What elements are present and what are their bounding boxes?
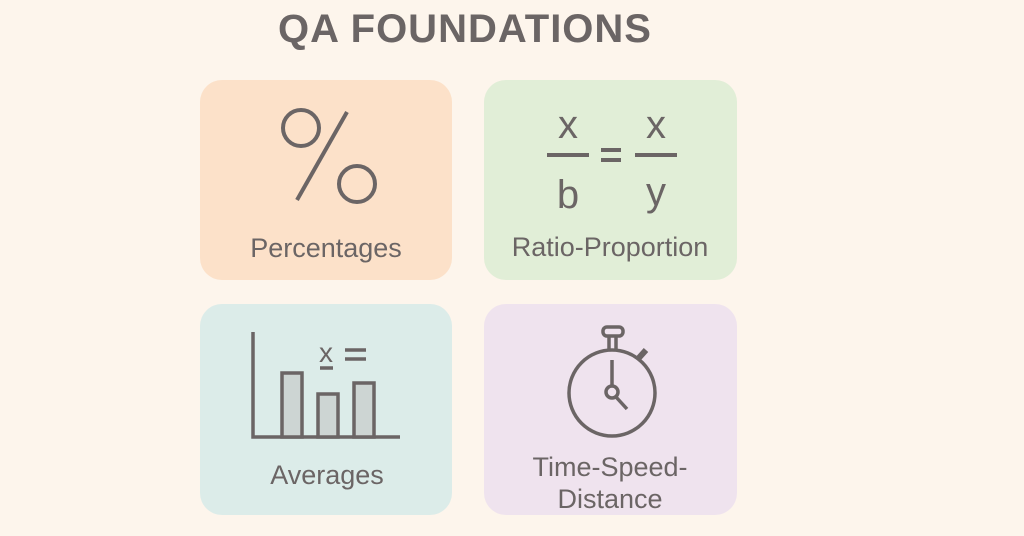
label: Averages: Averages	[270, 460, 384, 490]
icon: percent	[283, 110, 375, 202]
icon: ratio equation: y	[646, 170, 666, 214]
label: Percentages: Percentages	[250, 233, 402, 263]
icon: bar chart	[253, 332, 400, 437]
icon: ratio equation	[547, 103, 677, 217]
panel: ratio-proportion	[484, 80, 737, 280]
icon: ratio equation: x	[558, 103, 578, 147]
icon: ratio equation: x	[646, 103, 666, 147]
panel: averages: x	[319, 337, 333, 368]
title: QA FOUNDATIONS	[278, 7, 652, 51]
panel: time-speed-distance	[484, 304, 737, 515]
label: Time-Speed-Distance: Time-Speed-	[532, 452, 688, 482]
panel: averages	[200, 304, 452, 515]
panel: percentages	[200, 80, 452, 280]
panel: time-speed-distance: Distance	[557, 484, 663, 514]
icon: stopwatch	[569, 327, 655, 436]
icon: ratio equation: b	[557, 173, 579, 217]
label: Ratio-Proportion: Ratio-Proportion	[512, 232, 708, 262]
